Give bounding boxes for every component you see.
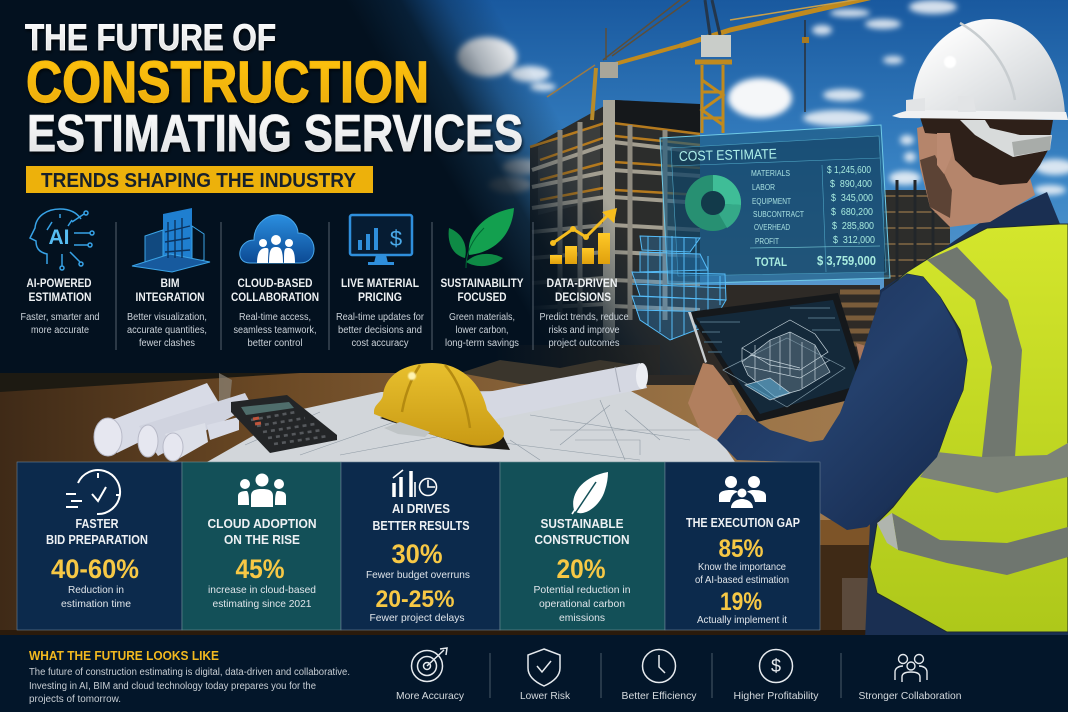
stat card: sustainable construction: Potential reduction in (534, 584, 631, 596)
stat card: cloud adoption: ON THE RISE (224, 532, 300, 547)
trend: live material pricing: cost accuracy (352, 338, 408, 349)
cost table: $ 312,000 (833, 235, 875, 246)
desk and blueprints scene (0, 360, 880, 635)
background: construction site sky (0, 0, 1068, 460)
trend: sustainability: long-term savings (445, 338, 519, 349)
head: skin (917, 118, 1035, 227)
clouds (457, 0, 1068, 195)
icon: green leaves (449, 208, 514, 268)
trend: sustainability (440, 208, 524, 349)
cost table: $ 285,800 (832, 221, 874, 232)
stat card: AI drives better results: BETTER RESULTS (372, 518, 470, 533)
main title (25, 17, 523, 163)
cost table: $ 890,400 (830, 179, 872, 190)
footer band (0, 635, 1068, 712)
trend: data-driven decisions: DECISIONS (555, 290, 611, 304)
stat card: faster bid preparation: Reduction in (68, 584, 124, 596)
benefit: stronger collaboration (858, 654, 962, 702)
stat card: AI drives better results: 30% (392, 539, 442, 569)
benefit: lower risk (520, 649, 571, 702)
shirt back and collar (865, 192, 1068, 640)
tower crane right (680, 0, 873, 133)
sleeve (717, 274, 967, 530)
stat card: cloud adoption: CLOUD ADOPTION (208, 516, 316, 531)
stat card: the execution gap: 85% (718, 535, 764, 563)
cost table: TOTAL (755, 257, 787, 269)
cost table: LABOR (752, 183, 775, 192)
stat card: the execution gap: 19% (720, 588, 762, 616)
trend: AI-powered estimation: Faster, smarter and (20, 312, 100, 323)
trend: sustainability: FOCUSED (458, 290, 507, 304)
stat card: sustainable construction: SUSTAINABLE (540, 516, 624, 531)
dirt mound behind desk (460, 360, 640, 386)
icon: cloud people (240, 215, 314, 263)
calculator (231, 395, 337, 453)
trend: sustainability: lower carbon, (456, 325, 508, 336)
trend: live material pricing: better decisions and (338, 325, 422, 336)
stat card: cloud adoption: estimating since 2021 (212, 598, 312, 610)
stat card: faster bid preparation: 40-60% (51, 554, 139, 584)
benefit: higher profitability (734, 650, 819, 702)
icon: rising chart (550, 208, 617, 264)
hi-vis vest (870, 224, 1068, 632)
stat card: faster bid preparation: FASTER (76, 516, 119, 531)
stat card: the execution gap: THE EXECUTION GAP (686, 515, 800, 530)
trend: cloud collaboration: better control (248, 338, 302, 349)
trend: cloud collaboration (231, 215, 319, 349)
stat card: the execution gap: of AI-based estimation (695, 574, 789, 586)
trend dividers (116, 222, 533, 350)
trend: BIM integration: accurate quantities, (127, 325, 207, 336)
stat card: cloud adoption: increase in cloud-based (208, 584, 316, 596)
main title: ESTIMATING SERVICES (27, 105, 523, 163)
building under construction (530, 100, 700, 375)
icon: chart and clock (393, 470, 436, 497)
subtitle banner: TRENDS SHAPING THE INDUSTRY (41, 170, 357, 192)
stat card: the execution gap (665, 462, 820, 630)
tower crane left (547, 0, 700, 120)
icon: AI head: AI (48, 226, 70, 249)
stat card: the execution gap: Actually implement it (697, 614, 787, 626)
footer heading: WHAT THE FUTURE LOOKS LIKE (29, 649, 219, 663)
trend: cloud collaboration: COLLABORATION (231, 290, 319, 304)
trend: AI-powered estimation: ESTIMATION (28, 290, 92, 304)
trend: BIM integration: BIM (160, 276, 180, 290)
cost table: OVERHEAD (754, 223, 790, 232)
stat card: faster bid preparation (17, 462, 182, 630)
benefit: more accuracy: More Accuracy (396, 690, 465, 702)
cost table: $ 1,245,600 (827, 165, 871, 176)
trend: AI-powered estimation (20, 209, 100, 336)
icon: team (719, 476, 766, 508)
stat card: cloud adoption (182, 462, 341, 630)
footer text: Investing in AI, BIM and cloud technology today prepares you for the (29, 681, 316, 692)
trend: AI-powered estimation: AI-POWERED (26, 276, 92, 290)
rolled blueprint right (482, 363, 648, 420)
trend: cloud collaboration: Real-time access, (239, 312, 311, 323)
icon: people (238, 474, 286, 507)
stat card: faster bid preparation: BID PREPARATION (46, 532, 148, 547)
worker (688, 19, 1068, 640)
left dark overlay (0, 0, 800, 375)
footer text: The future of construction estimating is digital, data-driven and collaborative. (29, 667, 350, 678)
blueprint sheet (207, 390, 735, 462)
stat card: sustainable construction (500, 462, 665, 630)
background building right (640, 180, 950, 400)
holographic cost estimate panel (660, 125, 890, 284)
trend: cloud collaboration: seamless teamwork, (234, 325, 316, 336)
cost table: SUBCONTRACT (753, 210, 804, 219)
trend: BIM integration: INTEGRATION (136, 290, 204, 304)
stat card: sustainable construction: 20% (556, 554, 606, 584)
stat card: AI drives better results: Fewer budget overruns (366, 569, 470, 581)
beard (920, 155, 952, 218)
trend: data-driven decisions (540, 208, 629, 349)
stat card: cloud adoption: 45% (236, 554, 284, 584)
benefit: better efficiency: Better Efficiency (622, 690, 697, 702)
benefit: better efficiency (622, 650, 697, 702)
benefit: more accuracy (396, 648, 465, 702)
cost table: PROFIT (755, 237, 779, 246)
icon: leaf (572, 472, 608, 518)
footer text (29, 667, 350, 705)
benefit: stronger collaboration: Stronger Collaboration (858, 690, 962, 702)
tablet with 3D model (688, 293, 870, 422)
trend: sustainability: Green materials, (449, 312, 515, 323)
main title: CONSTRUCTION (26, 50, 429, 115)
trend: live material pricing (336, 215, 425, 349)
icon: building (132, 208, 210, 272)
near hand (688, 363, 742, 440)
cost table: $ 680,200 (831, 207, 873, 218)
stat card: AI drives better results (341, 462, 500, 630)
stat card: AI drives better results: Fewer project delays (370, 612, 464, 624)
benefit: higher profitability: Higher Profitability (734, 690, 819, 702)
main title: THE FUTURE OF (25, 17, 276, 58)
stat card: sustainable construction: emissions (559, 612, 605, 624)
ear (937, 133, 952, 174)
trend: BIM integration: fewer clashes (139, 338, 195, 349)
footer text: projects of tomorrow. (29, 694, 121, 705)
stat card: AI drives better results: AI DRIVES (392, 501, 450, 516)
cost table: EQUIPMENT (752, 197, 791, 206)
trend: BIM integration (127, 208, 210, 349)
trend: live material pricing: Real-time updates for (336, 312, 425, 323)
donut chart (693, 175, 741, 228)
far hand (856, 343, 868, 362)
benefit: lower risk: Lower Risk (520, 690, 571, 702)
trend: live material pricing: PRICING (358, 290, 402, 304)
cost table (750, 165, 880, 269)
holo heading: COST ESTIMATE (679, 145, 777, 164)
hair (920, 117, 1053, 185)
trend: sustainability: SUSTAINABILITY (440, 276, 524, 290)
stat card: the execution gap: Know the importance (698, 561, 786, 573)
trend: data-driven decisions: Predict trends, reduce (540, 312, 629, 323)
rolled blueprints left (94, 373, 252, 461)
stat card: sustainable construction: CONSTRUCTION (534, 532, 630, 547)
cost table: $ 345,000 (831, 193, 873, 204)
benefit: higher profitability: $ (771, 656, 781, 676)
stat card: AI drives better results: 20-25% (376, 586, 454, 613)
trend: AI-powered estimation: more accurate (31, 325, 89, 336)
trend: data-driven decisions: risks and improve (548, 325, 620, 336)
white hard hat (892, 19, 1068, 157)
icon: stopwatch (66, 470, 120, 514)
cost table: MATERIALS (751, 169, 790, 178)
wireframe building hologram (632, 236, 726, 340)
cost table: $ 3,759,000 (817, 253, 876, 268)
trend: live material pricing: LIVE MATERIAL (341, 276, 419, 290)
trend: cloud collaboration: CLOUD-BASED (238, 276, 313, 290)
trend: data-driven decisions: DATA-DRIVEN (546, 276, 618, 290)
stat card: faster bid preparation: estimation time (61, 598, 131, 610)
trend: BIM integration: Better visualization, (127, 312, 207, 323)
trend: data-driven decisions: project outcomes (548, 338, 620, 349)
icon: monitor with dollar: $ (390, 226, 402, 251)
wood stand right of cards (820, 520, 870, 635)
yellow hard hat (374, 363, 510, 450)
stat card: sustainable construction: operational carbon (539, 598, 625, 610)
